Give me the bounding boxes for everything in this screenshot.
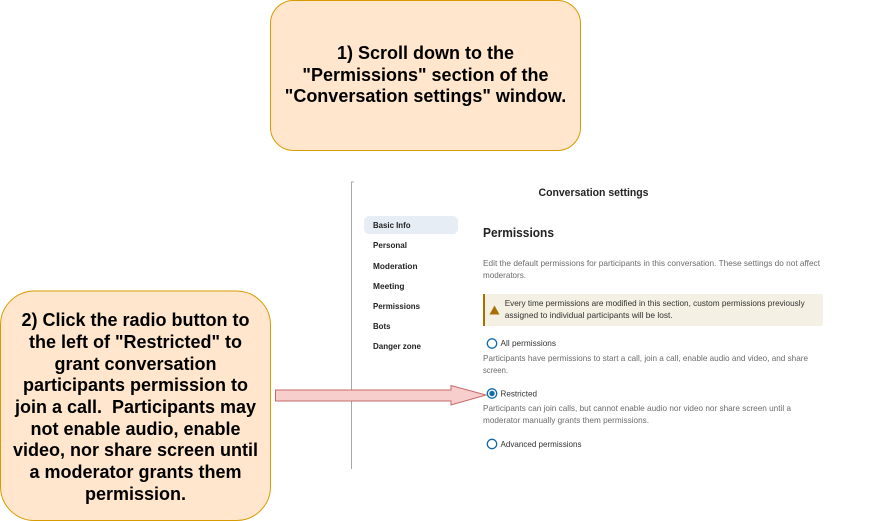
option: restricted: moderator manually grants them permissions. xyxy=(483,415,649,425)
dialog title: Conversation settings xyxy=(538,187,648,199)
callout: step 2 xyxy=(0,291,270,520)
section heading: Permissions xyxy=(483,225,554,240)
option: restricted: Participants can join calls, but cannot enable audio nor video nor share screen until a xyxy=(483,403,791,413)
callout: step 2: not enable audio, enable xyxy=(30,419,241,439)
navigation sidebar: Permissions xyxy=(373,301,420,311)
section description: moderators. xyxy=(483,270,526,280)
navigation sidebar xyxy=(364,216,458,351)
option: restricted: Restricted xyxy=(500,388,537,398)
navigation sidebar: Moderation xyxy=(373,261,418,271)
warning notice: assigned to individual participants will be lost. xyxy=(505,310,673,320)
callout: step 2: participants permission to xyxy=(23,375,248,395)
navigation sidebar: Bots xyxy=(373,321,391,331)
callout: step 1: 1) Scroll down to the xyxy=(337,43,514,63)
callout: step 1 xyxy=(270,0,580,150)
warning notice: Every time permissions are modified in this section, custom permissions previously xyxy=(505,298,805,308)
option: restricted xyxy=(483,388,791,425)
option: all permissions: Participants have permissions to start a call, join a call, enable audio and video, and share xyxy=(483,353,808,363)
option: all permissions: All permissions xyxy=(500,338,556,348)
callout: step 2: video, nor share screen until xyxy=(13,440,258,460)
callout: step 1: "Conversation settings" window. xyxy=(285,86,566,106)
callout: step 2: join a call. Participants may xyxy=(14,397,256,417)
panel left edge xyxy=(352,182,354,469)
option: advanced permissions: Advanced permissions xyxy=(500,439,582,449)
option: all permissions: screen. xyxy=(483,365,508,375)
navigation sidebar: Danger zone xyxy=(373,341,421,351)
warning notice xyxy=(483,294,823,326)
callout: step 1: "Permissions" section of the xyxy=(302,65,549,85)
icon: warning triangle xyxy=(490,306,500,314)
navigation sidebar: Meeting xyxy=(373,281,404,291)
navigation sidebar: Personal xyxy=(373,240,407,250)
callout: step 2: permission. xyxy=(85,484,186,504)
callout: step 2: the left of "Restricted" to xyxy=(29,332,242,352)
callout: step 2: grant conversation xyxy=(54,354,217,374)
callout: step 2: a moderator grants them xyxy=(29,462,242,482)
arrow: from step 2 to restricted radio button xyxy=(276,386,486,405)
callout: step 2: 2) Click the radio button to xyxy=(22,310,250,330)
navigation sidebar: Basic Info xyxy=(373,220,410,230)
section description: Edit the default permissions for participants in this conversation. These settings do not affect xyxy=(483,258,821,268)
option: all permissions xyxy=(483,338,808,375)
panel: conversation settings screenshot xyxy=(352,182,823,469)
